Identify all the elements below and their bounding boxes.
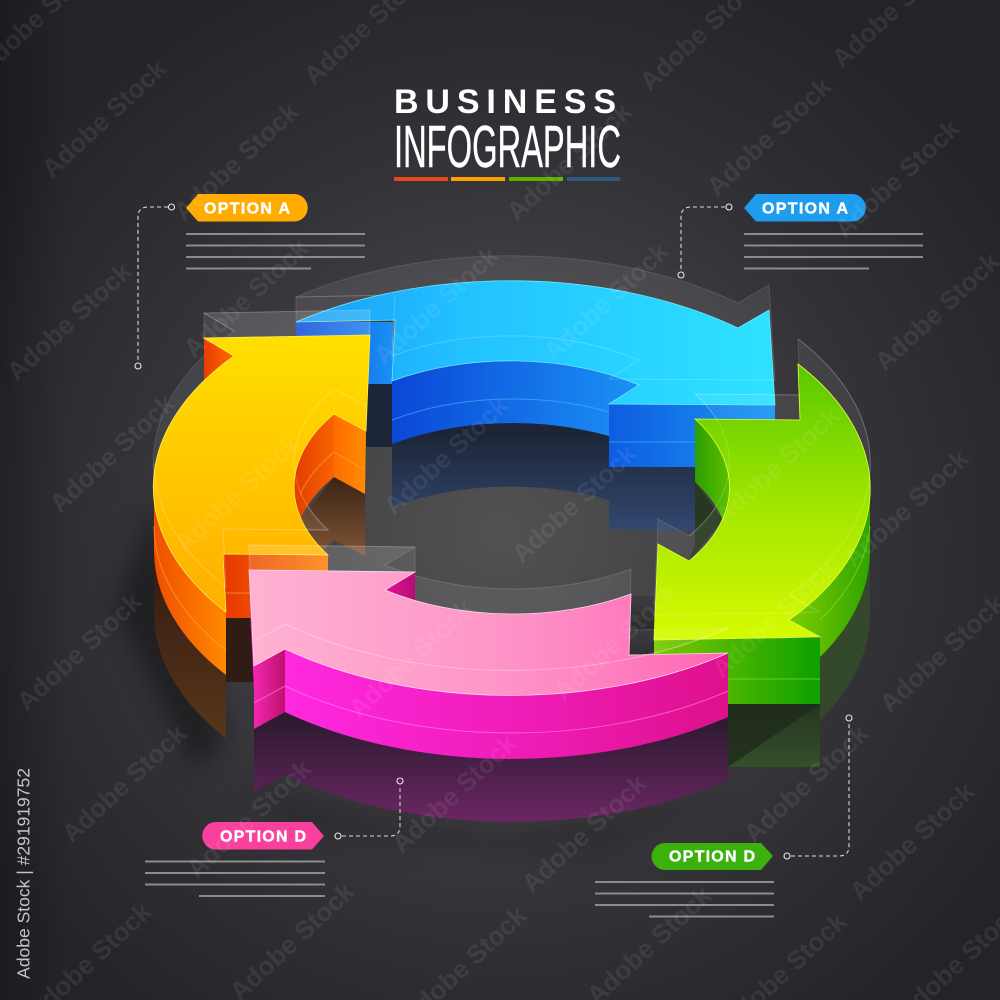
- yellow ghost: [153, 310, 370, 587]
- green ghost outline: [654, 339, 870, 615]
- watermark: Adobe Stock: [178, 233, 315, 364]
- arrow: yellow: [153, 310, 370, 675]
- title: [394, 83, 621, 181]
- watermark: Adobe Stock: [181, 753, 318, 884]
- pink left strip: [249, 590, 254, 690]
- reflection: green head: [728, 704, 820, 767]
- pink ghost outline: [254, 624, 728, 670]
- watermark: Adobe Stock: [506, 438, 643, 569]
- reflections under arrows: [154, 383, 870, 822]
- gap shadow between pink and green: [628, 596, 656, 656]
- connector: [678, 204, 732, 278]
- green outer side: [789, 487, 870, 657]
- pink ghost head band: [249, 545, 415, 572]
- callout: bottom right option D: [595, 715, 852, 916]
- pink side line: [254, 686, 728, 733]
- reflection: blue: [392, 423, 695, 531]
- tag text: OPTION A: [762, 200, 848, 218]
- green head face: [654, 638, 820, 704]
- text lines: [595, 882, 774, 916]
- yellow outer side: [154, 488, 226, 675]
- connector: [135, 204, 174, 369]
- watermark: Adobe Stock: [44, 388, 181, 519]
- watermark: Adobe Stock: [829, 113, 966, 244]
- callout: top left option A: [135, 194, 365, 369]
- pink barb: [254, 649, 285, 729]
- reflection: green inner: [689, 482, 723, 561]
- watermark: Adobe Stock: [844, 776, 981, 907]
- reflection: yellow notch: [300, 477, 365, 556]
- tag text: OPTION A: [204, 200, 290, 218]
- watermark: Adobe Stock: [501, 96, 638, 227]
- reflection: yellow head: [226, 618, 256, 682]
- blue inner side: [392, 361, 639, 444]
- title colour bars: [394, 177, 620, 181]
- watermark: Adobe Stock: [36, 53, 173, 184]
- blue top face: [296, 281, 775, 405]
- watermark: Adobe Stock: [1, 256, 138, 387]
- tag: [186, 194, 308, 222]
- heading: infographic: INFOGRAPHIC: [394, 114, 621, 180]
- blue tail face: [296, 322, 393, 384]
- blue ghost tail band: [296, 295, 395, 322]
- reflection: yellow: [154, 551, 226, 738]
- blue ghost outline: [392, 295, 775, 380]
- pink inner triangle: [385, 572, 415, 600]
- tag text: OPTION D: [220, 828, 306, 846]
- connector: [784, 715, 852, 859]
- arrow: blue: [296, 256, 775, 467]
- pink outer side: [285, 649, 728, 759]
- reflection: pink: [254, 712, 728, 822]
- callout: top right option A: [678, 194, 923, 278]
- green top face: [654, 364, 870, 640]
- watermark: Adobe Stock: [378, 390, 515, 521]
- tag text: OPTION D: [669, 848, 755, 866]
- tag: [744, 194, 866, 222]
- watermark: Adobe Stock: [538, 236, 675, 367]
- blue side lines: [392, 399, 700, 442]
- watermark: Adobe Stock: [706, 553, 843, 684]
- yellow side lines: [154, 452, 365, 650]
- watermark: Adobe Stock: [343, 593, 480, 724]
- stock image id: Adobe Stock | #291919752: [14, 768, 34, 979]
- watermark: Adobe Stock: [386, 728, 523, 859]
- tag: [652, 843, 773, 870]
- yellow head face: [223, 554, 328, 618]
- reflection: blue tail: [366, 383, 392, 447]
- connector: [335, 778, 403, 839]
- watermark: Adobe Stock: [548, 576, 685, 707]
- watermark: Adobe Stock: [168, 96, 305, 227]
- watermark: Adobe Stock: [11, 586, 148, 717]
- yellow inner side: [293, 414, 334, 520]
- watermark: Adobe Stock: [838, 443, 975, 574]
- text lines: [186, 234, 365, 268]
- green inner side: [695, 419, 730, 520]
- yellow top face: [153, 335, 370, 612]
- text lines: [145, 862, 325, 896]
- text lines: [744, 234, 923, 268]
- green side line: [654, 526, 870, 679]
- callout: bottom left option D: [145, 778, 403, 896]
- watermark: Adobe Stock: [701, 71, 838, 202]
- pink top face: [249, 570, 728, 695]
- watermark: Adobe Stock: [368, 240, 505, 371]
- green ghost: [654, 339, 870, 615]
- blue head face: [609, 404, 775, 467]
- soft floor shadow: [115, 500, 728, 860]
- watermark: Adobe Stock: [709, 400, 846, 531]
- watermark: Adobe Stock: [56, 718, 193, 849]
- pink ghost: [249, 545, 728, 670]
- tag: [202, 822, 324, 850]
- yellow ghost outline: [154, 313, 366, 587]
- arrow: green: [654, 339, 870, 704]
- watermark: Adobe Stock: [169, 428, 306, 559]
- yellow notch face: [334, 414, 366, 494]
- watermark: Adobe Stock: [516, 768, 653, 899]
- yellow barb: [204, 338, 234, 381]
- arrow: pink: [249, 545, 728, 759]
- heading: business: BUSINESS: [394, 83, 616, 121]
- blue ghost: [296, 256, 775, 380]
- watermark: Adobe Stock: [738, 718, 875, 849]
- reflection: green: [820, 551, 870, 720]
- yellow ghost head band: [204, 310, 370, 338]
